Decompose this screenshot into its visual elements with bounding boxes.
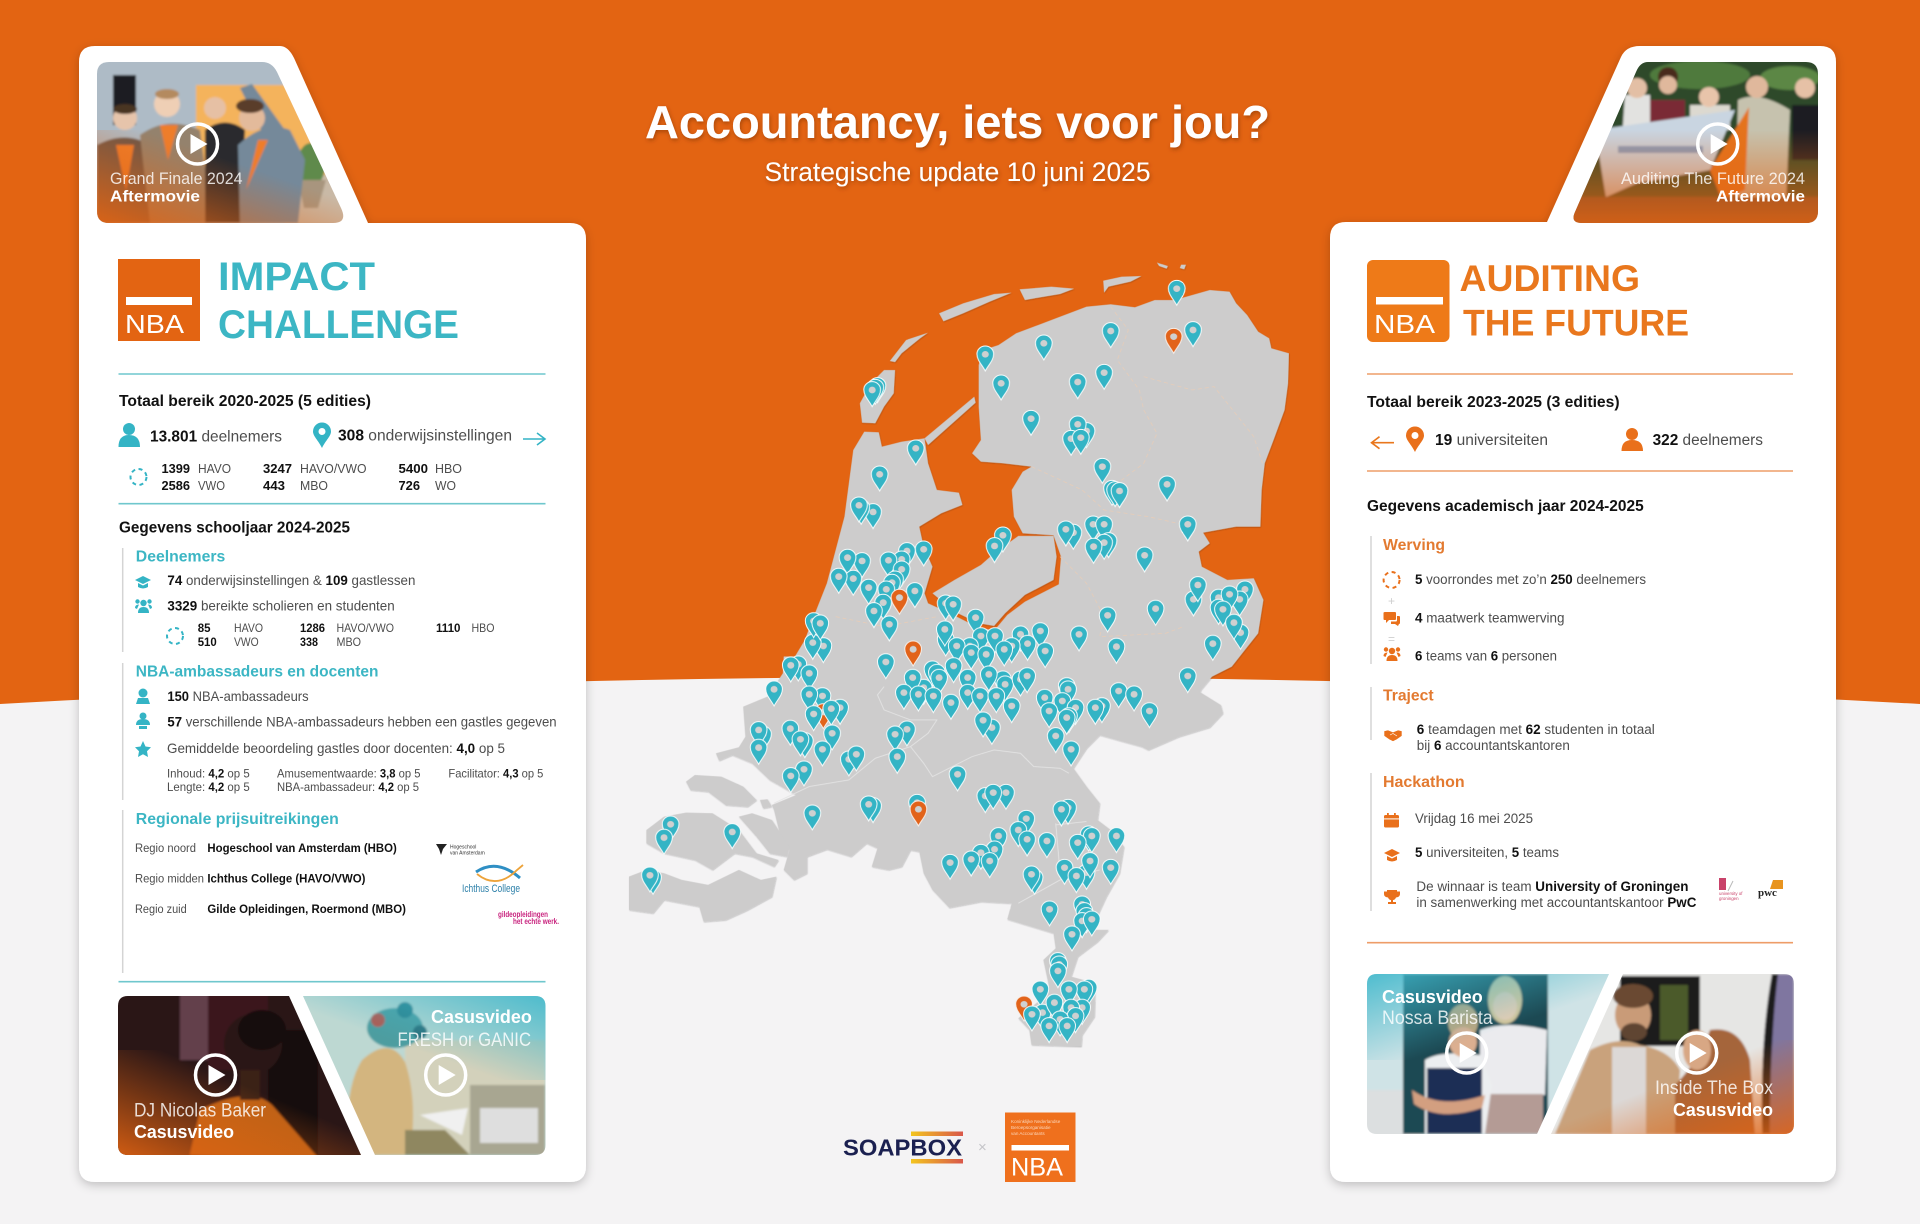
subsection: traject	[1383, 688, 1655, 753]
video caption: Auditing The Future 2024	[1621, 170, 1805, 188]
background curve	[0, 0, 1920, 704]
main title: Accountancy, iets voor jou?	[645, 96, 1270, 148]
icon: presenter	[136, 712, 150, 729]
rating breakdown	[167, 767, 544, 794]
logo: PwC	[1758, 880, 1783, 899]
winners list: Regio midden	[135, 874, 204, 886]
breakdown table: 5400	[398, 461, 428, 476]
heading: auditing the future: AUDITING	[1460, 258, 1640, 299]
breakdown table	[198, 621, 494, 649]
plus sign: +	[1388, 594, 1395, 608]
province borders	[774, 307, 1263, 903]
logo: NBA rounded	[1367, 260, 1450, 342]
subsection: werving: 6 teams van 6 personen	[1415, 649, 1557, 664]
winners list: Gilde Opleidingen, Roermond (MBO)	[207, 904, 406, 916]
video caption	[134, 1101, 267, 1142]
subsection: ambassadeurs en docenten: NBA-ambassadeurs en docenten	[136, 664, 378, 681]
icon: chat	[1384, 612, 1400, 626]
subsection: deelnemers	[135, 549, 494, 649]
breakdown table: VWO	[198, 478, 225, 493]
winners list: Ichthus College (HAVO/VWO)	[207, 874, 366, 886]
logo: Hogeschool van Amsterdam	[436, 844, 485, 856]
video thumbnail: Nossa Barista	[1367, 974, 1609, 1134]
icon: person	[118, 423, 140, 447]
video caption: Casusvideo	[1382, 986, 1483, 1007]
heading: impact challenge: IMPACT	[218, 255, 375, 299]
section: gegevens schooljaar	[119, 520, 559, 973]
subsection: traject: bij 6 accountantskantoren	[1417, 738, 1570, 753]
logo: Hogeschool van Amsterdam: Hogeschool	[450, 844, 476, 850]
orange location pins north	[905, 328, 1182, 666]
icon: handshake	[1384, 730, 1402, 742]
subsection: deelnemers: 74 onderwijsinstellingen & 109 gastlessen	[167, 572, 415, 588]
icon: pin	[1406, 426, 1424, 452]
breakdown table: 3247	[263, 461, 292, 476]
breakdown table: MBO	[300, 478, 328, 493]
logo: Ichthus College	[462, 865, 523, 895]
subsection: ambassadeurs en docenten	[135, 664, 557, 794]
breakdown table: 510	[198, 635, 217, 649]
land shapes	[629, 263, 1289, 1047]
breakdown table: HAVO/VWO	[336, 621, 394, 635]
section heading: Gegevens academisch jaar 2024-2025	[1367, 498, 1644, 515]
video thumbnail: auditing the future aftermovie	[1574, 62, 1818, 223]
section: totaal bereik	[1367, 394, 1763, 452]
breakdown table: HBO	[472, 621, 494, 635]
subsection: ambassadeurs en docenten: Gemiddelde beoordeling gastles door docenten: 4,0 op 5	[167, 740, 505, 756]
section: totaal bereik	[118, 393, 545, 493]
play button	[1447, 1033, 1487, 1073]
breakdown table: HAVO	[234, 621, 263, 635]
heading: auditing the future	[1460, 258, 1689, 344]
stat: universiteiten: 19 universiteiten	[1435, 432, 1548, 449]
subsection: traject: Traject	[1383, 688, 1434, 705]
partner logos	[843, 1112, 1076, 1182]
video thumbnail: DJ Nicolas Baker	[118, 996, 361, 1155]
rating breakdown: Lengte: 4,2 op 5	[167, 780, 250, 794]
subsection: hackathon: De winnaar is team University of Groningen	[1416, 879, 1688, 894]
teal location pins north	[766, 280, 1253, 734]
subsection: regionale prijsuitreikingen	[135, 811, 559, 926]
logo: NBA orange	[118, 259, 200, 341]
logo: NBA: van Accountants	[1011, 1131, 1045, 1136]
video caption: Casusvideo	[431, 1006, 532, 1027]
icon: dashed circle	[1384, 572, 1400, 588]
subsection: werving	[1383, 537, 1646, 664]
icon: ambassador	[136, 688, 150, 704]
panel: auditing the future	[1330, 46, 1836, 1182]
logo: university of groningen: groningen	[1719, 896, 1739, 901]
breakdown table: HBO	[435, 461, 462, 476]
breakdown table: 1110	[436, 621, 461, 635]
subsection: traject: 6 teamdagen met 62 studenten in totaal	[1417, 722, 1655, 737]
logo: NBA: NBA	[1011, 1154, 1063, 1182]
icon: trophy	[1384, 890, 1400, 904]
icon: dashed circle	[167, 628, 183, 644]
winners list: Regio zuid	[135, 904, 187, 916]
section heading: Totaal bereik 2020-2025 (5 edities)	[119, 393, 371, 410]
video caption	[398, 1006, 532, 1051]
section heading: Gegevens schooljaar 2024-2025	[119, 520, 350, 537]
logo: Gilde Opleidingen: het echte werk.	[513, 917, 559, 926]
arrow left	[1372, 437, 1394, 449]
subsection: werving: Werving	[1383, 537, 1445, 554]
card background	[79, 46, 586, 1182]
heading: auditing the future: THE FUTURE	[1463, 302, 1689, 344]
video thumbnail: grand finale aftermovie	[97, 62, 344, 223]
video caption	[1621, 170, 1805, 206]
breakdown table: 85	[198, 621, 211, 635]
subsection: hackathon: 5 universiteiten, 5 teams	[1415, 845, 1559, 860]
section: gegevens academisch jaar	[1367, 498, 1783, 911]
winners list: Hogeschool van Amsterdam (HBO)	[207, 843, 397, 855]
breakdown table: VWO	[234, 635, 259, 649]
breakdown table: 338	[300, 635, 318, 649]
video caption: Casusvideo	[1673, 1099, 1773, 1120]
subsection: ambassadeurs en docenten: 150 NBA-ambassadeurs	[167, 688, 309, 704]
video caption	[1655, 1078, 1773, 1120]
logo: NBA: Beroepsorganisatie	[1011, 1125, 1051, 1130]
logo: university of groningen: university of	[1719, 891, 1743, 896]
subsection: werving: 5 voorrondes met zo’n 250 deelnemers	[1415, 572, 1646, 587]
panel: impact challenge	[79, 46, 586, 1182]
play button	[196, 1055, 236, 1095]
heading: impact challenge: CHALLENGE	[218, 303, 459, 347]
logo: NBA rounded: NBA	[1374, 309, 1436, 339]
video caption: Inside The Box	[1655, 1078, 1773, 1099]
icon: pin	[313, 422, 331, 448]
icon: calendar	[1384, 813, 1399, 828]
video caption: DJ Nicolas Baker	[134, 1101, 267, 1122]
video caption: Aftermovie	[1716, 188, 1805, 206]
video thumbnail: FRESH or GANIC	[300, 990, 550, 1160]
breakdown table: 1399	[162, 461, 190, 476]
breakdown table: HAVO	[198, 461, 231, 476]
breakdown table: 443	[263, 478, 285, 493]
subsection: deelnemers: 3329 bereikte scholieren en studenten	[167, 598, 395, 614]
icon: dashed circle	[130, 469, 146, 485]
logo: Soapbox: SOAPBOX	[843, 1134, 963, 1160]
stat: deelnemers: 13.801 deelnemers	[150, 428, 282, 446]
card background	[1330, 46, 1836, 1182]
icon: graduation cap	[1384, 849, 1400, 862]
play button	[178, 124, 218, 164]
video caption: Casusvideo	[134, 1121, 234, 1142]
subsection: hackathon: Hackathon	[1383, 774, 1465, 791]
video caption: Grand Finale 2024	[110, 170, 242, 188]
times sign: ×	[978, 1139, 987, 1156]
subsection: deelnemers: Deelnemers	[136, 549, 225, 566]
video caption: Aftermovie	[110, 188, 200, 206]
icon: team	[1384, 647, 1400, 661]
logo: Ichthus College: Ichthus College	[462, 883, 520, 895]
subsection: werving: 4 maatwerk teamwerving	[1415, 611, 1564, 626]
rating breakdown: Facilitator: 4,3 op 5	[448, 767, 544, 781]
icon: graduation cap	[135, 576, 151, 588]
subsection: hackathon: in samenwerking met accountantskantoor PwC	[1416, 895, 1697, 910]
icon: star	[135, 741, 151, 757]
subsection: hackathon: Vrijdag 16 mei 2025	[1415, 811, 1533, 826]
location pins south	[642, 699, 1125, 1043]
icon: person	[1622, 428, 1643, 451]
heading: impact challenge	[218, 255, 459, 347]
logo: Gilde Opleidingen: gildeopleidingen	[498, 910, 548, 919]
breakdown table: WO	[435, 478, 456, 493]
video caption: Nossa Barista	[1382, 1008, 1493, 1029]
equals sign: =	[1388, 632, 1395, 646]
arrow right	[523, 433, 545, 445]
section heading: Totaal bereik 2023-2025 (3 edities)	[1367, 394, 1620, 411]
video caption	[1382, 986, 1493, 1029]
video thumbnail: Inside The Box	[1551, 974, 1794, 1134]
play button	[1677, 1033, 1717, 1073]
breakdown table: 726	[398, 478, 420, 493]
breakdown table: HAVO/VWO	[300, 461, 366, 476]
play button	[426, 1055, 466, 1095]
subsection: hackathon	[1383, 774, 1783, 910]
video caption	[110, 170, 242, 206]
rating breakdown: NBA-ambassadeur: 4,2 op 5	[277, 780, 419, 794]
winners list: Regio noord	[135, 843, 196, 855]
video caption: FRESH or GANIC	[398, 1030, 531, 1051]
breakdown table: 2586	[162, 478, 190, 493]
rating breakdown: Amusementwaarde: 3,8 op 5	[277, 767, 421, 781]
logo: Gilde Opleidingen	[498, 910, 559, 926]
icon: group	[135, 599, 152, 613]
breakdown table: 1286	[300, 621, 325, 635]
logo: NBA: Koninklijke Nederlandse	[1011, 1119, 1061, 1124]
subtitle: Strategische update 10 juni 2025	[764, 157, 1150, 187]
stat: onderwijsinstellingen: 308 onderwijsinstellingen	[338, 428, 512, 444]
logo: NBA	[1005, 1112, 1076, 1182]
logo: PwC: pwc	[1758, 887, 1777, 899]
stat: deelnemers: 322 deelnemers	[1653, 432, 1763, 449]
subsection: regionale prijsuitreikingen: Regionale prijsuitreikingen	[136, 811, 339, 828]
logo: Hogeschool van Amsterdam: van Amsterdam	[450, 850, 485, 856]
subsection: ambassadeurs en docenten: 57 verschillende NBA-ambassadeurs hebben een gastles gegeven	[167, 714, 557, 730]
rating breakdown: Inhoud: 4,2 op 5	[167, 767, 250, 781]
map of the Netherlands	[629, 263, 1289, 1047]
logo: NBA orange: NBA	[125, 309, 185, 339]
play button	[1698, 124, 1738, 164]
breakdown table: MBO	[336, 635, 361, 649]
logo: university of groningen	[1719, 878, 1743, 901]
breakdown table	[162, 461, 462, 493]
title block	[645, 96, 1270, 187]
winners list	[135, 843, 406, 916]
